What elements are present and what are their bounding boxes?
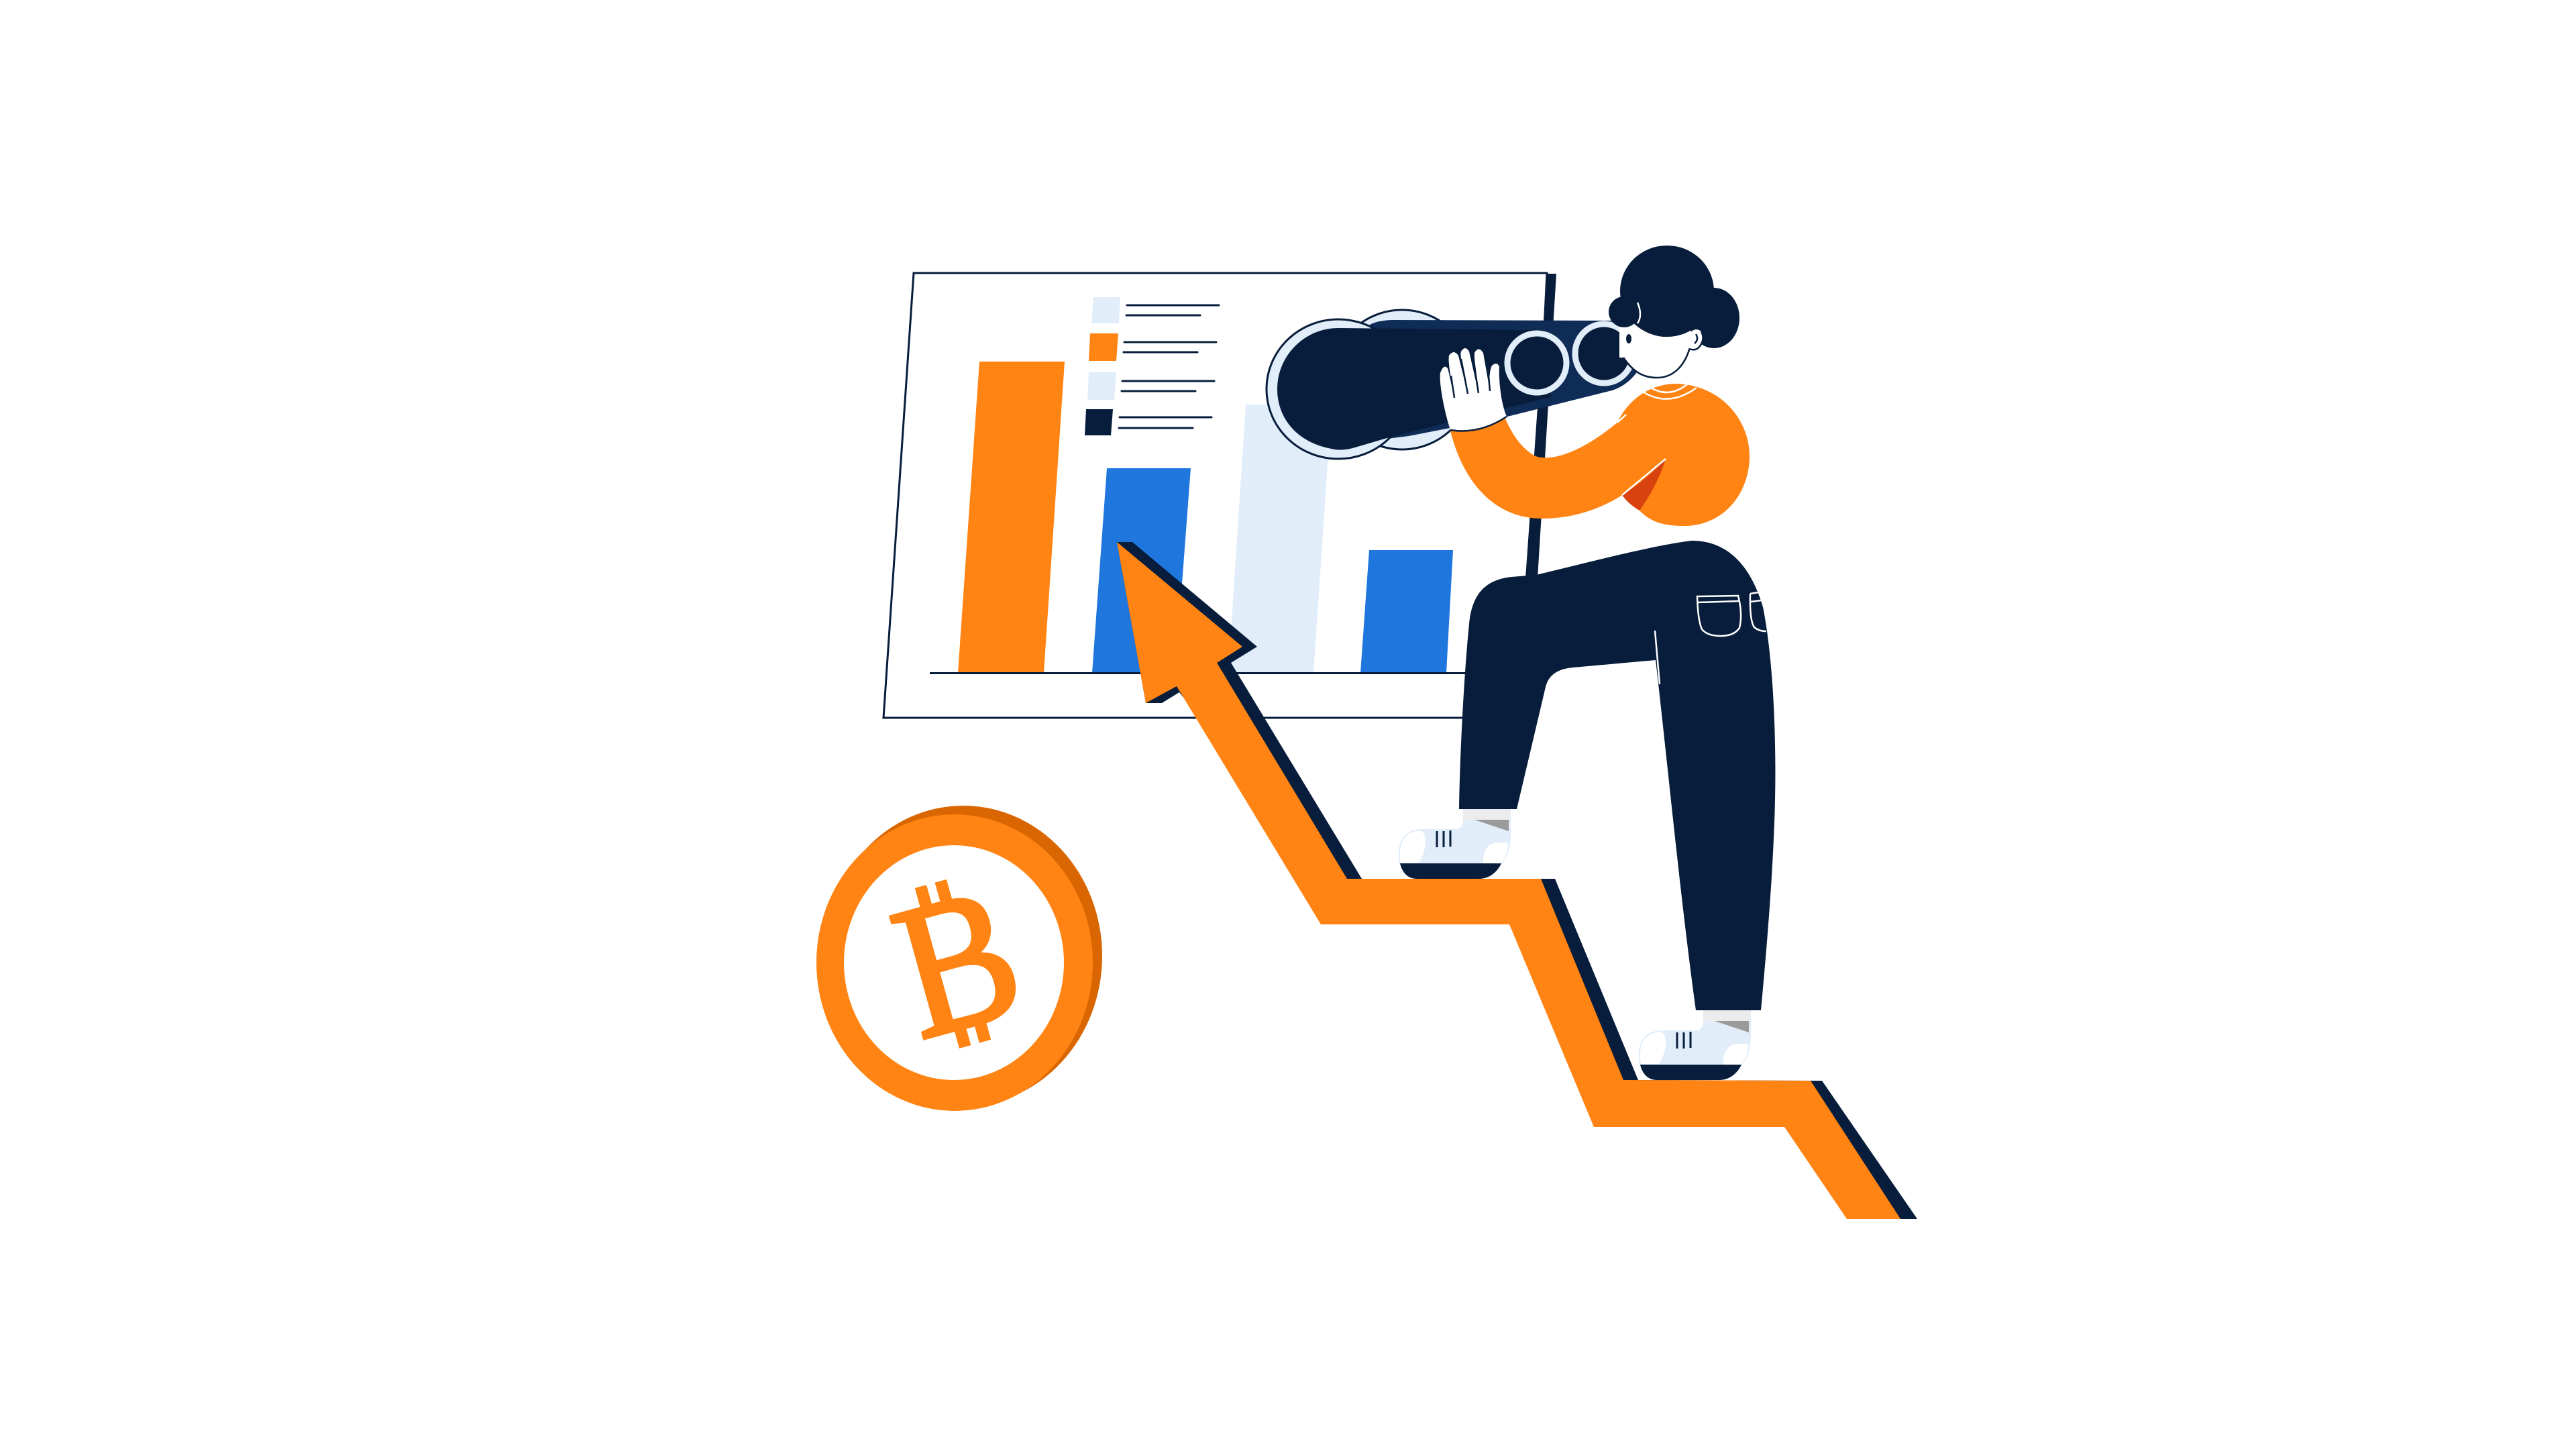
back lens [1332,310,1472,449]
shoe: lower right foot [1640,1010,1750,1080]
torso sweater [1450,384,1750,526]
barrel back [1364,320,1637,439]
shirt shadow [1622,459,1666,511]
front lens [1267,319,1410,459]
shoe: upper left foot [1399,810,1510,879]
bar chart [930,362,1483,674]
arrow: rising zigzag line [1117,542,1917,1219]
hair highlight [1638,303,1640,323]
icon: bitcoin coin [816,806,1102,1111]
head [1609,246,1739,378]
panel: chart board [883,273,1556,718]
sweater arm [1450,415,1666,519]
hair [1609,246,1739,348]
eye [1626,334,1631,343]
trousers [1459,541,1775,1010]
arrow body [1117,542,1900,1219]
binoculars [1267,310,1637,459]
collar rings [1643,384,1697,399]
barrel front [1277,328,1551,450]
arrow shadow [1117,542,1917,1219]
back pockets [1697,592,1766,636]
board right edge [1525,274,1556,578]
ear [1688,329,1703,350]
hand [1440,348,1507,431]
eyepiece rings [1507,333,1566,392]
person [1267,246,1775,1080]
face [1619,322,1690,378]
chart legend [1085,297,1219,435]
bitcoin symbol: B [874,845,1041,1079]
